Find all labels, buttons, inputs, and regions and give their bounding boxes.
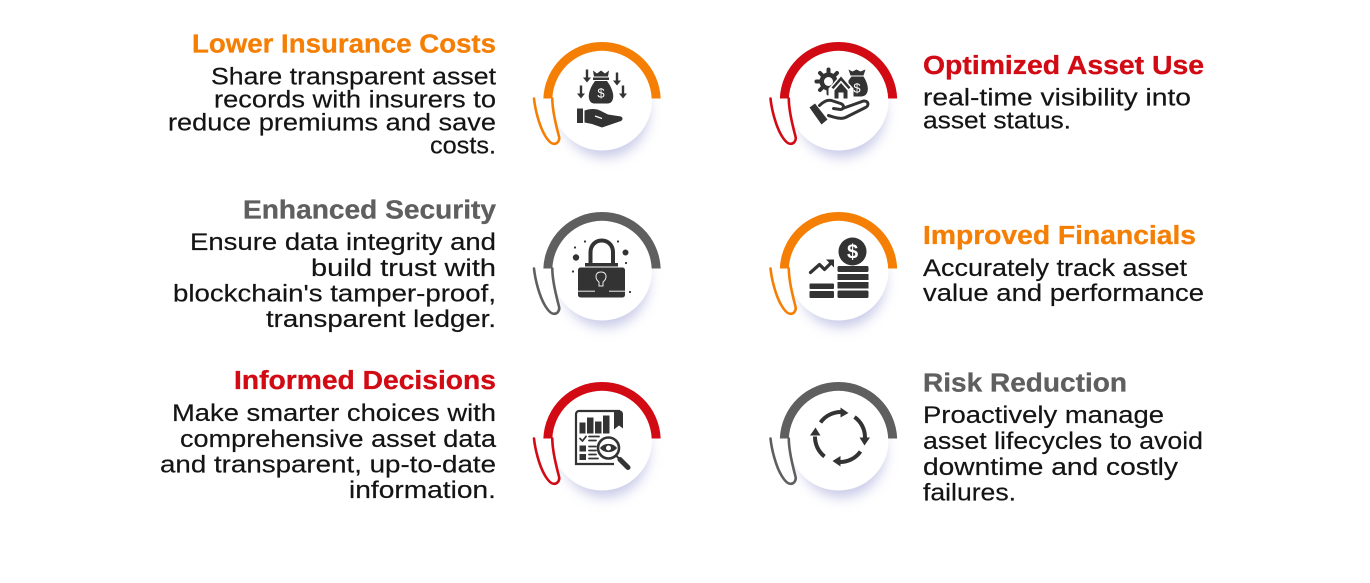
icon: coin stacks and growth arrow: $ — [847, 242, 858, 264]
text block: risk reduction description: downtime and costly — [923, 454, 1179, 481]
text block: informed decisions description: information. — [349, 477, 496, 504]
panel: optimized asset use text — [923, 52, 1204, 134]
badge: improved financials — [770, 212, 897, 328]
icon: money bag and hand: $ — [597, 86, 605, 100]
text block: informed decisions description: and transparent, up-to-date — [160, 452, 496, 478]
heading: lower insurance costs: Lower Insurance Costs — [192, 30, 496, 58]
text block: risk reduction description — [923, 402, 1203, 506]
text block: improved financials description: Accurately track asset — [923, 255, 1187, 282]
icon: padlock — [572, 240, 631, 298]
text block: optimized asset use description: real-time visibility into — [923, 84, 1191, 112]
icon: circular arrows — [810, 408, 870, 466]
badge: informed decisions — [534, 382, 661, 498]
text block: enhanced security description — [173, 229, 496, 333]
panel: improved financials text — [923, 222, 1204, 307]
panel: enhanced security text — [173, 196, 497, 333]
icon: gear, house, money bag and hand: $ — [853, 80, 861, 96]
text block: enhanced security description: blockchain's tamper-proof, — [173, 280, 496, 308]
text block: lower insurance costs description: reduce premiums and save — [168, 109, 496, 136]
text block: enhanced security description: build trust with — [311, 255, 496, 282]
text block: lower insurance costs description — [168, 63, 496, 159]
text block: risk reduction description: asset lifecycles to avoid — [923, 428, 1203, 455]
badge: enhanced security — [534, 212, 661, 328]
text block: risk reduction description: failures. — [923, 480, 1016, 506]
text block: enhanced security description: Ensure data integrity and — [190, 229, 496, 256]
text block: risk reduction description: Proactively manage — [923, 402, 1164, 429]
heading: informed decisions: Informed Decisions — [234, 367, 496, 395]
heading: risk reduction: Risk Reduction — [923, 370, 1127, 398]
heading: enhanced security: Enhanced Security — [243, 196, 497, 224]
text block: improved financials description — [923, 255, 1204, 307]
panel: lower insurance costs text — [168, 30, 496, 159]
badge: optimized asset use — [770, 42, 897, 157]
panel: informed decisions text — [160, 367, 496, 504]
badge: lower insurance costs — [534, 42, 661, 157]
text block: informed decisions description: Make smarter choices with — [172, 400, 496, 427]
text block: lower insurance costs description: costs. — [430, 132, 496, 159]
text block: optimized asset use description: asset status. — [923, 108, 1071, 134]
heading: optimized asset use: Optimized Asset Use — [923, 52, 1204, 80]
heading: improved financials: Improved Financials — [923, 222, 1196, 250]
text block: informed decisions description — [160, 400, 496, 504]
badge: risk reduction — [770, 382, 897, 498]
text block: improved financials description: value and performance — [923, 280, 1204, 307]
text block: lower insurance costs description: Share transparent asset — [211, 63, 496, 90]
text block: optimized asset use description — [923, 84, 1191, 134]
icon: report and magnifier — [576, 410, 628, 468]
text block: lower insurance costs description: records with insurers to — [214, 86, 496, 113]
panel: risk reduction text — [923, 370, 1203, 506]
text block: enhanced security description: transparent ledger. — [266, 306, 496, 333]
text block: informed decisions description: comprehensive asset data — [180, 426, 496, 453]
